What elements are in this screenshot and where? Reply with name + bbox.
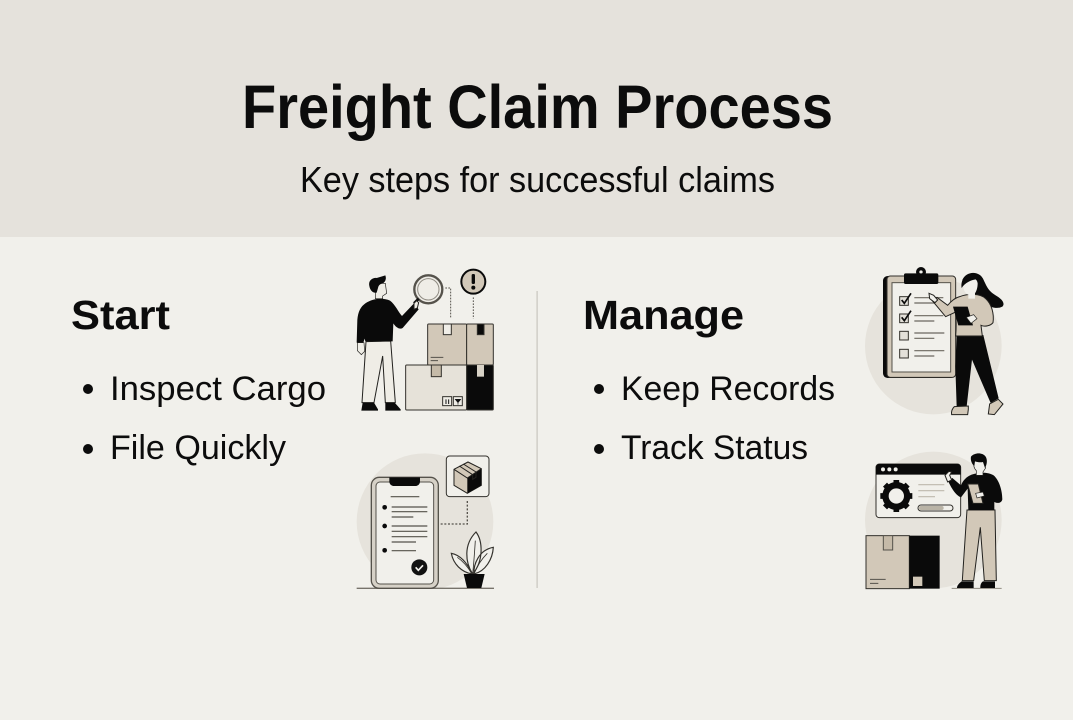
settings window <box>876 464 961 518</box>
panel: start <box>71 270 494 590</box>
dashed connector <box>441 500 467 524</box>
icon: woman with clipboard <box>865 267 1004 415</box>
checklist card <box>371 477 438 588</box>
header band <box>0 0 1073 237</box>
plant <box>451 532 493 588</box>
boxes <box>406 324 493 410</box>
title: Freight Claim Process <box>242 73 833 141</box>
icon: phone checklist with plant <box>357 453 494 590</box>
dashed connectors <box>445 288 473 319</box>
list item: file quickly: File Quickly <box>110 429 286 467</box>
heading: manage: Manage <box>583 292 744 338</box>
man <box>945 453 1002 588</box>
list item: inspect cargo: Inspect Cargo <box>110 370 326 408</box>
icon: person inspecting boxes <box>357 270 493 411</box>
box badge <box>446 456 489 497</box>
cardboard box <box>866 536 940 589</box>
clipboard <box>883 267 956 378</box>
divider <box>536 291 538 588</box>
gear <box>880 480 912 512</box>
panel: manage <box>583 267 1004 589</box>
woman <box>962 273 1004 308</box>
subtitle: Key steps for successful claims <box>300 159 775 200</box>
list item: track status: Track Status <box>621 429 808 467</box>
heading: start: Start <box>71 292 170 338</box>
magnifier <box>414 275 442 303</box>
person <box>362 341 395 403</box>
alert badge <box>461 270 485 294</box>
list item: keep records: Keep Records <box>621 370 835 408</box>
icon: man with settings window <box>865 452 1002 589</box>
